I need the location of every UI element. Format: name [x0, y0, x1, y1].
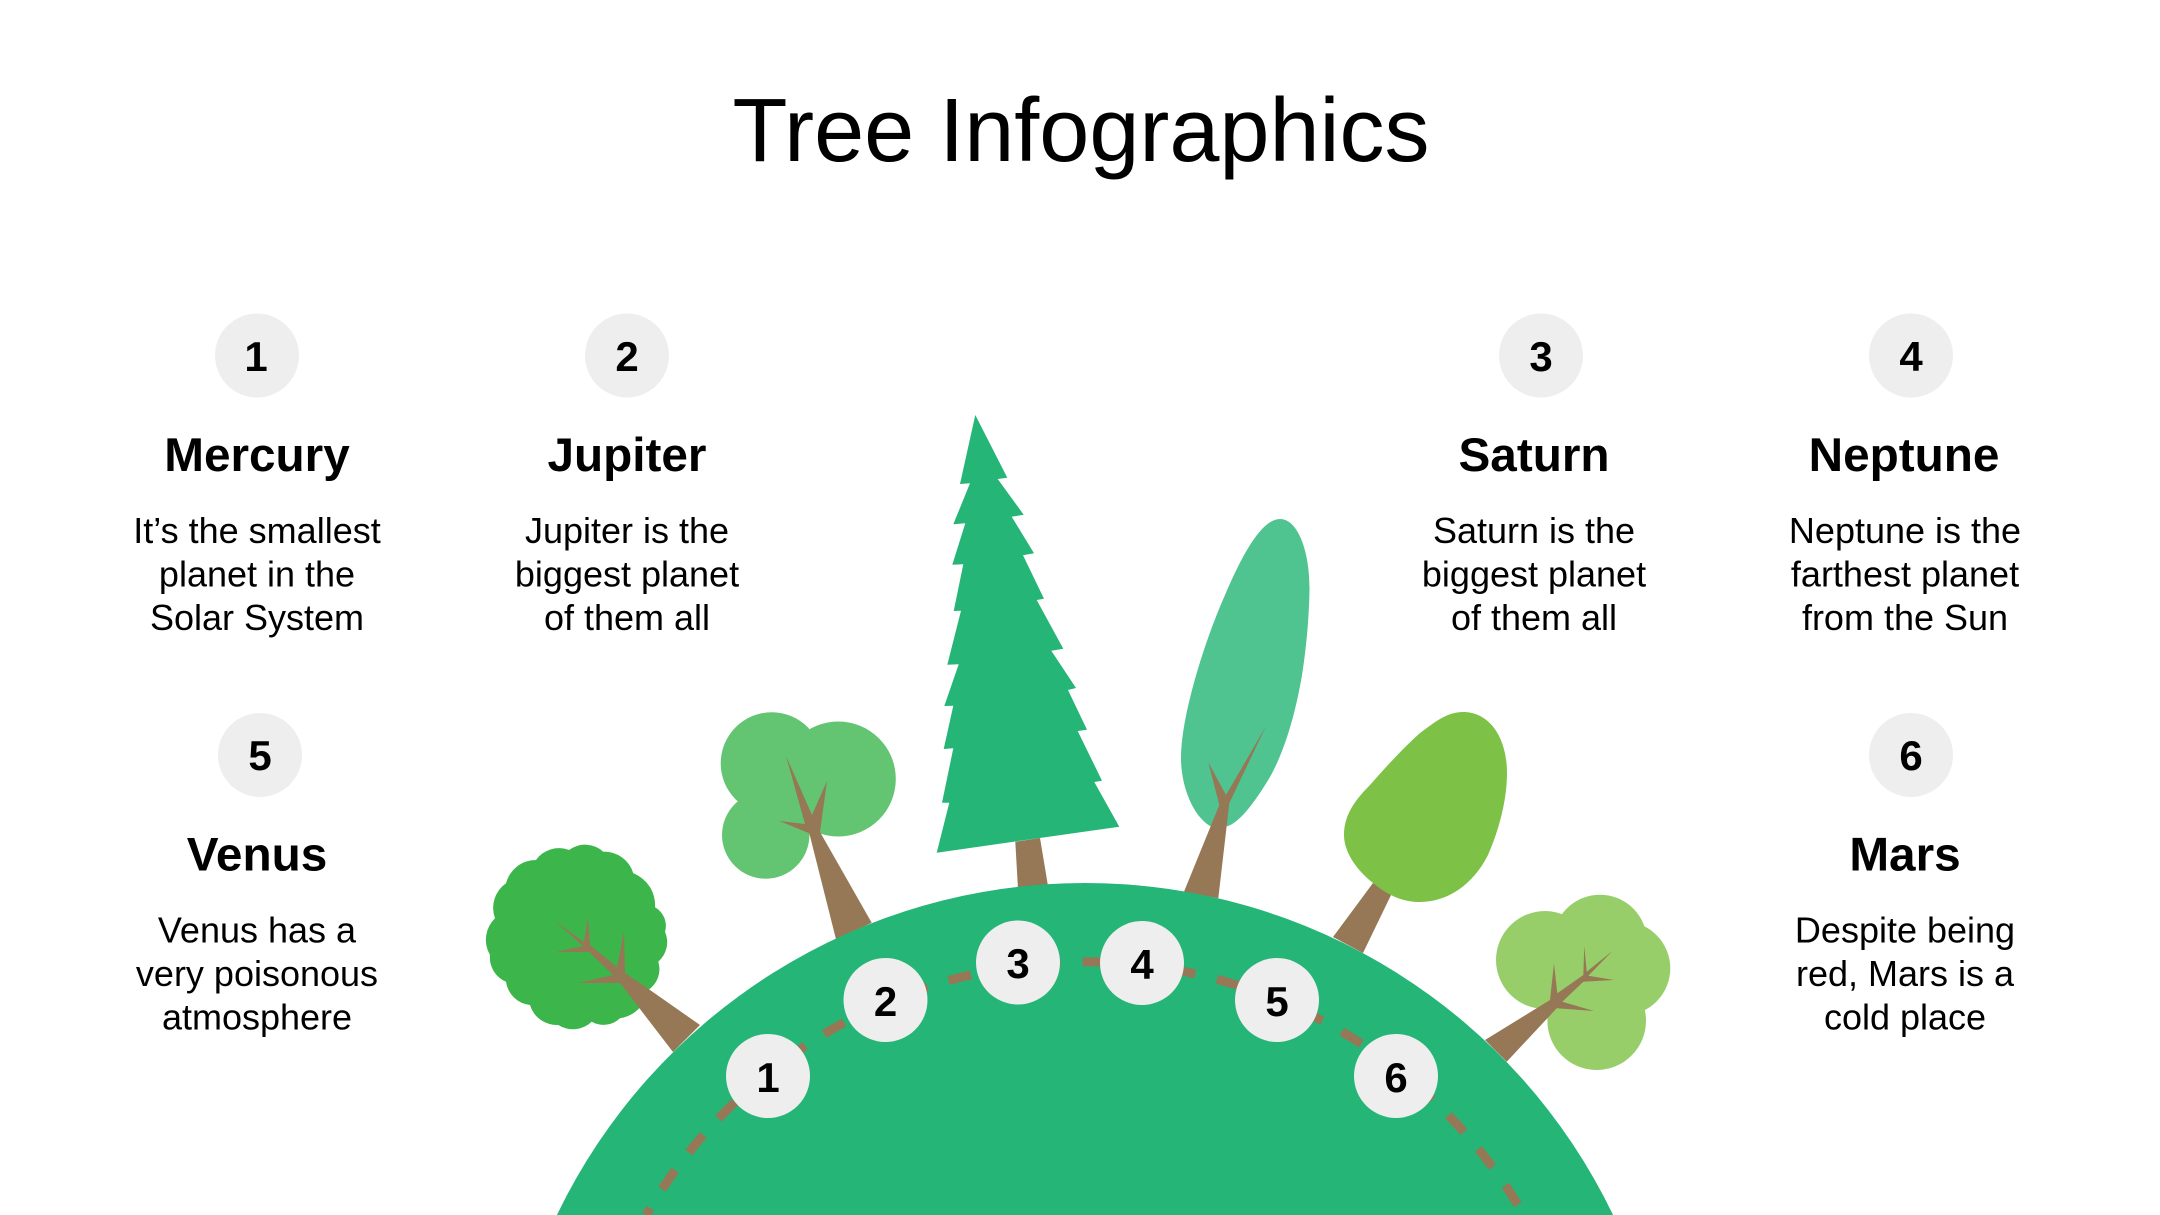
panel: item 2 Jupiter: of them all [544, 597, 710, 638]
panel: item 3 Saturn: of them all [1451, 597, 1617, 638]
path marker 5: 5 [1265, 978, 1289, 1025]
panel: item 1 Mercury: planet in the [159, 554, 355, 594]
panel: item 3 Saturn: biggest planet [1422, 554, 1646, 594]
panel: item 4 Neptune: 4 [1899, 333, 1923, 380]
panel: item 5 Venus: Venus has a [158, 910, 357, 950]
panel: item 2 Jupiter: biggest planet [515, 554, 739, 594]
panel: item 5 Venus: Venus [187, 828, 327, 882]
path marker 1: 1 [756, 1054, 780, 1101]
panel: item 3 Saturn: 3 [1529, 333, 1553, 380]
path marker 4: 4 [1130, 941, 1154, 988]
panel: item 5 Venus: atmosphere [162, 996, 352, 1038]
tree 6: four-lobed light green [1485, 895, 1670, 1070]
panel: item 1 Mercury [133, 314, 381, 638]
path marker 4 [1100, 921, 1184, 1005]
panel: item 5 Venus [136, 713, 378, 1038]
panel: item 4 Neptune [1789, 314, 2021, 638]
path marker 3: 3 [1006, 940, 1030, 987]
path marker 6 [1354, 1034, 1438, 1118]
panel: item 2 Jupiter: 2 [615, 333, 639, 380]
panel: item 1 Mercury: It’s the smallest [133, 510, 381, 551]
path marker 2: 2 [874, 978, 897, 1025]
path marker 6: 6 [1384, 1054, 1408, 1101]
path marker 2 [844, 958, 928, 1042]
panel: item 3 Saturn: Saturn [1458, 429, 1610, 482]
title: Tree Infographics [732, 81, 1430, 181]
panel: item 6 Mars: Mars [1849, 828, 1961, 882]
panel: item 4 Neptune: Neptune [1809, 429, 1999, 482]
panel: item 2 Jupiter [515, 314, 739, 638]
panel: item 2 Jupiter: Jupiter is the [525, 510, 729, 551]
tree 1: scalloped dark green [486, 845, 700, 1052]
panel: item 6 Mars: 6 [1899, 732, 1923, 779]
panel: item 4 Neptune: farthest planet [1791, 554, 2019, 594]
panel: item 6 Mars: Despite being [1795, 910, 2015, 950]
panel: item 6 Mars: red, Mars is a [1796, 953, 2015, 994]
dashed path [646, 962, 1524, 1215]
tree 5: lime green egg [1333, 712, 1507, 953]
panel: item 5 Venus: very poisonous [136, 953, 378, 994]
path marker 3 [976, 920, 1060, 1004]
panel: item 3 Saturn [1422, 314, 1646, 638]
panel: item 5 Venus: 5 [248, 732, 272, 779]
path marker 5 [1235, 958, 1319, 1042]
planet hill [557, 883, 1613, 1215]
panel: item 1 Mercury: Solar System [150, 597, 364, 638]
panel: item 6 Mars [1795, 713, 2015, 1038]
panel: item 3 Saturn: Saturn is the [1433, 510, 1635, 551]
path marker 1 [726, 1034, 810, 1118]
panel: item 6 Mars: cold place [1824, 996, 1986, 1038]
panel: item 1 Mercury: Mercury [164, 429, 350, 482]
tree 4: tall teal teardrop [1181, 519, 1310, 898]
panel: item 4 Neptune: Neptune is the [1789, 510, 2021, 551]
tree 2: three-lobed green [721, 712, 896, 939]
panel: item 4 Neptune: from the Sun [1802, 597, 2008, 638]
tree 3: pine [937, 415, 1119, 889]
panel: item 2 Jupiter: Jupiter [548, 429, 706, 482]
panel: item 1 Mercury: 1 [244, 333, 268, 380]
